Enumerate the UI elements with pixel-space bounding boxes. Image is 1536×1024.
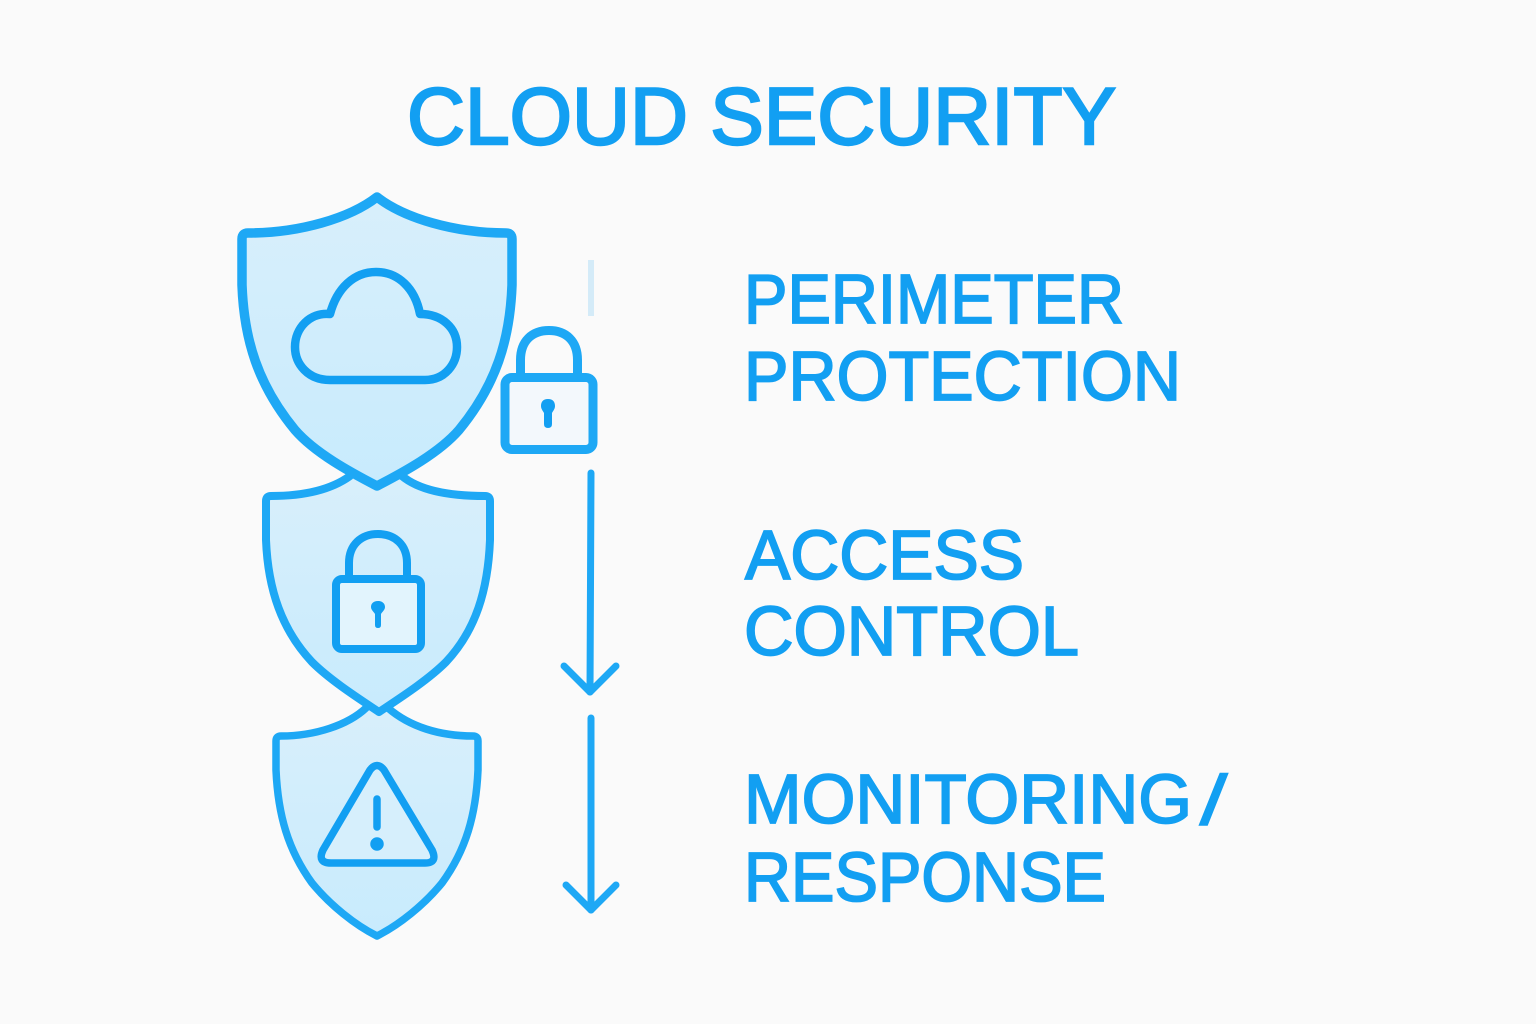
shield 3: monitoring with warning [276,708,478,936]
icon: cloud [295,272,457,380]
icon: keyhole [371,601,385,628]
arrow 1 [564,473,616,692]
label: monitoring / response: MONITORING [744,760,1192,838]
icon: warning triangle [321,766,434,863]
icon: side keyhole [541,399,555,428]
icon: padlock in shield [336,534,421,649]
arrow 2 [566,718,616,910]
shield 2: access with lock [266,476,490,712]
title: CLOUD SECURITY [407,72,1116,162]
label: perimeter protection: PERIMETER [744,260,1124,338]
faint vertical mark [588,260,594,316]
label: access control: CONTROL [744,592,1079,670]
label: monitoring / response: RESPONSE [744,838,1106,916]
label: perimeter protection: PROTECTION [744,337,1181,415]
label: access control: ACCESS [745,516,1024,594]
label: access control [744,516,1079,670]
icon: side padlock [505,330,593,450]
label: perimeter protection [744,260,1181,415]
label: monitoring / response [744,760,1228,916]
label: monitoring / response: / [1199,761,1228,841]
shield 1: perimeter with cloud [242,197,512,486]
